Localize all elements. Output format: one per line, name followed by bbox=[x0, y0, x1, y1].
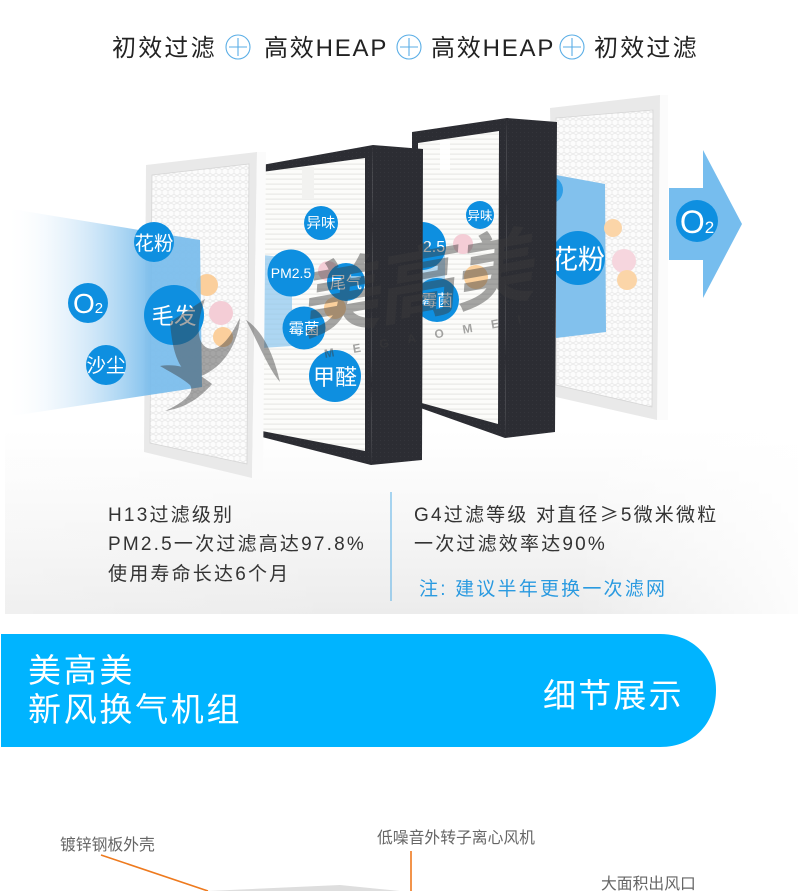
bubble: 甲醛 bbox=[309, 350, 361, 402]
icon: plus 2 bbox=[397, 35, 421, 59]
bubble: 花粉 right: 花粉 bbox=[551, 245, 605, 275]
background shading behind filters bbox=[5, 430, 798, 614]
spec text: left column: 使用寿命长达6个月 bbox=[108, 563, 290, 585]
spec text: right column bbox=[414, 500, 718, 600]
left bubbles bbox=[68, 222, 204, 385]
particle dots filter 2 bbox=[318, 261, 346, 319]
spec text: right column: 一次过滤效率达90% bbox=[414, 533, 607, 555]
spec text: left column bbox=[108, 504, 366, 585]
bubble: 异味 mid bbox=[466, 201, 494, 229]
bubble: partly hidden bbox=[535, 176, 563, 204]
banner label: 细节展示 bbox=[543, 677, 684, 714]
icon: plus 3 bbox=[560, 35, 584, 59]
bubble: O2: O2 bbox=[73, 288, 103, 319]
filter 2: dark HEPA filter bbox=[262, 145, 423, 465]
bubble: PM2.5: PM2.5 bbox=[271, 265, 311, 281]
spec text: left column: H13过滤级别 bbox=[108, 504, 234, 526]
air flow band through filter 4 bbox=[556, 175, 606, 338]
bubble: PM2.5 mid: PM2.5 bbox=[399, 239, 445, 256]
spec text: right column: G4过滤等级 对直径≥5微米微粒 bbox=[414, 500, 718, 527]
output arrow with O2 bbox=[669, 150, 742, 298]
bubble: 毛发 bbox=[144, 285, 204, 345]
callout: 镀锌钢板外壳 bbox=[60, 836, 208, 891]
bubble: 异味 bbox=[304, 206, 338, 240]
particle dots filter 1 bbox=[196, 274, 233, 347]
bubble: 尾气: 尾气 bbox=[330, 274, 362, 292]
bubble: 毛发: 毛发 bbox=[151, 304, 197, 329]
spec text: left column: PM2.5一次过滤高达97.8% bbox=[108, 533, 366, 555]
bubble: 沙尘 bbox=[86, 345, 126, 385]
bubble: 甲醛: 甲醛 bbox=[313, 365, 357, 390]
particle dots filter 4 bbox=[604, 219, 637, 290]
bubble: 花粉 right bbox=[551, 231, 605, 285]
bubble: 异味: 异味 bbox=[306, 215, 336, 232]
air flow band in filter 3 bbox=[418, 240, 445, 318]
heading: filter sequence: 初效过滤 bbox=[112, 35, 217, 62]
bubble: O2 output: O2 bbox=[680, 204, 714, 240]
bubble: 霉菌 bbox=[282, 306, 326, 350]
bubble: 霉菌: 霉菌 bbox=[288, 320, 320, 338]
callout: 低噪音外转子离心风机: 低噪音外转子离心风机 bbox=[377, 829, 535, 847]
banner title: 新风换气机组 bbox=[28, 691, 242, 728]
heading: filter sequence bbox=[112, 35, 699, 62]
filter 4: rear white mesh filter bbox=[535, 95, 668, 420]
bubble: 花粉 bbox=[134, 222, 174, 262]
filter 3: dark HEPA filter bbox=[398, 118, 557, 438]
bubble: O2 bbox=[68, 283, 108, 323]
bubble: 花粉: 花粉 bbox=[134, 233, 174, 255]
bubble: 尾气 bbox=[327, 263, 365, 301]
heading: filter sequence: 高效HEAP bbox=[264, 35, 388, 62]
note: 注: 建议半年更换一次滤网 bbox=[419, 578, 667, 600]
watermark logo bbox=[160, 220, 546, 411]
bubble: 异味 mid: 异味 bbox=[467, 209, 493, 223]
bubble: 沙尘: 沙尘 bbox=[86, 355, 126, 377]
bubble: 霉菌 mid: 霉菌 bbox=[421, 292, 453, 310]
banner: detail display bbox=[1, 634, 716, 747]
watermark logo: MEGAOMEI bbox=[323, 309, 541, 361]
bubble: 霉菌 mid bbox=[415, 278, 459, 322]
heading: filter sequence: 初效过滤 bbox=[594, 35, 699, 62]
icon: plus 1 bbox=[226, 35, 250, 59]
air flow band in filter 2 bbox=[262, 255, 292, 348]
watermark logo: 美高美 bbox=[290, 220, 546, 350]
product top edge bbox=[208, 885, 400, 891]
bubble: PM2.5 bbox=[268, 250, 314, 296]
callout: 镀锌钢板外壳: 镀锌钢板外壳 bbox=[60, 836, 155, 854]
bubble: PM2.5 mid bbox=[398, 222, 446, 270]
air flow band entering bbox=[5, 208, 202, 417]
banner title: 美高美 bbox=[28, 652, 135, 689]
banner title bbox=[28, 652, 242, 728]
heading: filter sequence: 高效HEAP bbox=[431, 35, 555, 62]
filter 1: front white mesh filter bbox=[144, 152, 266, 478]
particle dots filter 3 bbox=[453, 234, 488, 289]
